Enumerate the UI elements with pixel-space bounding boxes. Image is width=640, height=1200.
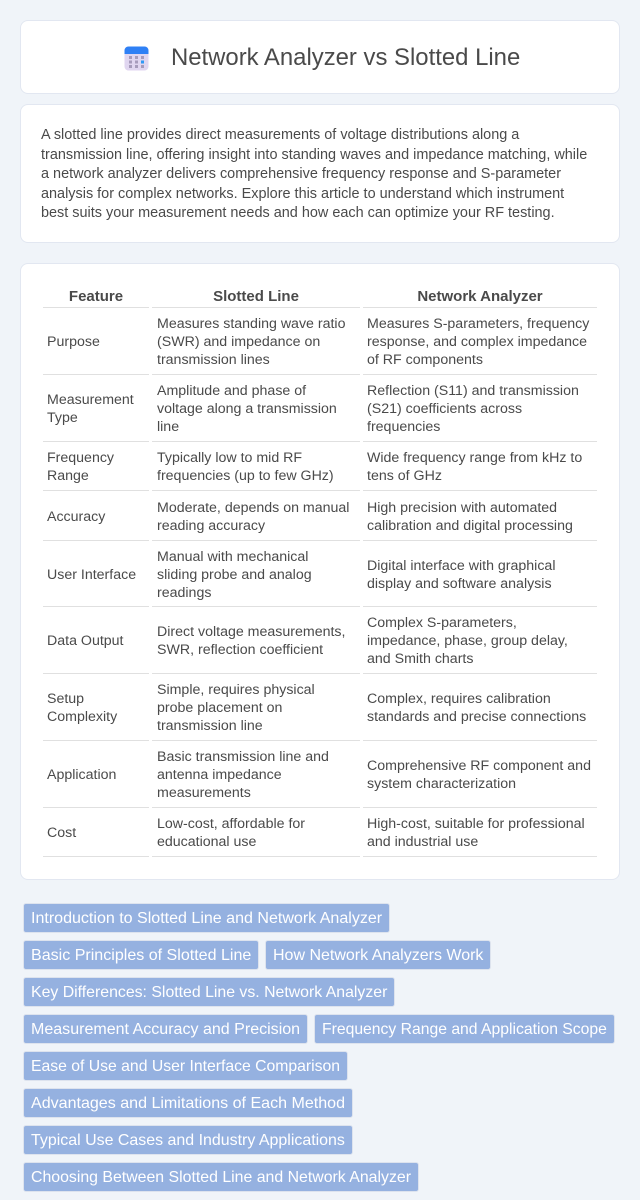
row: setup complexity — [43, 682, 597, 741]
row: accuracy: Moderate, depends on manual — [157, 500, 349, 516]
tag — [23, 1051, 348, 1081]
tag: Measurement Accuracy and Precision — [31, 1020, 300, 1038]
row: cost: and industrial use — [367, 834, 478, 850]
row: purpose: Measures standing wave ratio — [157, 316, 345, 332]
row: user interface: Manual with mechanical — [157, 548, 308, 564]
row: frequency range: Typically low to mid RF — [157, 450, 302, 466]
row: user interface: sliding probe and analog — [157, 566, 312, 582]
row: accuracy: reading accuracy — [157, 518, 265, 534]
intro text: a network analyzer delivers comprehensive frequency response and S-parameter — [41, 166, 561, 182]
row: frequency range: Range — [47, 468, 89, 484]
tag — [23, 1162, 419, 1192]
row: frequency range — [43, 450, 597, 491]
row: data output: impedance, phase, group delay, — [367, 633, 568, 649]
row: setup complexity: Complex, requires calibration — [367, 691, 551, 707]
row: user interface: Digital interface with graphical — [367, 558, 555, 574]
row: accuracy: calibration and digital processing — [367, 518, 573, 534]
row: measurement type: line — [157, 419, 179, 435]
row: application: Comprehensive RF component and — [367, 758, 591, 774]
tag — [314, 1014, 615, 1044]
row: cost — [43, 816, 597, 857]
row: purpose: Purpose — [47, 334, 100, 350]
row: data output: SWR, reflection coefficient — [157, 642, 323, 658]
tag: Key Differences: Slotted Line vs. Network Analyzer — [31, 984, 387, 1001]
table header: Feature — [69, 288, 123, 305]
row: setup complexity: standards and precise connections — [367, 709, 586, 725]
row: cost: educational use — [157, 834, 256, 850]
row: accuracy: Accuracy — [47, 508, 105, 524]
row: measurement type: Type — [47, 410, 78, 426]
tag — [23, 940, 259, 970]
row: user interface: readings — [157, 584, 211, 600]
tag — [265, 940, 491, 970]
row: data output: Complex S-parameters, — [367, 615, 517, 631]
row: purpose: (SWR) and impedance on — [157, 334, 320, 350]
row: application: Application — [47, 767, 116, 783]
tag: Ease of Use and User Interface Comparison — [31, 1058, 340, 1075]
row: setup complexity: transmission line — [157, 718, 263, 734]
row: setup complexity: probe placement on — [157, 700, 282, 716]
tag — [23, 1014, 308, 1044]
tag — [23, 977, 395, 1007]
row: measurement type: (S21) coefficients across — [367, 401, 522, 417]
row: accuracy — [43, 500, 597, 541]
row: measurement type: frequencies — [367, 419, 440, 435]
intro text: A slotted line provides direct measurements of voltage distributions along a — [41, 127, 519, 143]
intro text: transmission line, offering insight into standing waves and impedance matching, while — [41, 146, 587, 162]
tag — [23, 1088, 353, 1118]
row: application: Basic transmission line and — [157, 749, 329, 765]
header card — [20, 20, 620, 94]
row: purpose — [43, 316, 597, 375]
tag: Choosing Between Slotted Line and Network Analyzer — [31, 1169, 411, 1186]
title: Network Analyzer vs Slotted Line — [171, 44, 520, 71]
tag: Frequency Range and Application Scope — [322, 1021, 607, 1038]
row: application: antenna impedance — [157, 767, 282, 783]
table header — [43, 288, 597, 308]
intro text — [41, 127, 587, 221]
row: purpose: transmission lines — [157, 352, 270, 368]
row: data output — [43, 615, 597, 674]
row: data output: Direct voltage measurements, — [157, 624, 345, 640]
tag — [23, 1125, 353, 1155]
table header: Network Analyzer — [417, 288, 543, 305]
tag: Typical Use Cases and Industry Applications — [31, 1132, 345, 1149]
row: measurement type — [43, 383, 597, 442]
topic tags — [23, 903, 615, 1192]
comparison table — [43, 288, 597, 857]
tag — [23, 903, 390, 933]
intro text: analysis for complex networks. Explore this article to understand which instrument — [41, 186, 564, 202]
row: user interface — [43, 548, 597, 607]
row: measurement type: Amplitude and phase of — [157, 383, 306, 399]
row: measurement type: Reflection (S11) and transmission — [367, 383, 579, 399]
row: frequency range: Frequency — [47, 450, 114, 466]
row: frequency range: Wide frequency range from kHz to — [367, 450, 582, 466]
tag: How Network Analyzers Work — [273, 947, 483, 964]
row: frequency range: frequencies (up to few GHz) — [157, 468, 334, 484]
row: measurement type: Measurement — [47, 392, 134, 408]
row: frequency range: tens of GHz — [367, 468, 442, 484]
intro card — [20, 104, 620, 243]
row: accuracy: High precision with automated — [367, 500, 557, 516]
row: application — [43, 749, 597, 808]
row: application: system characterization — [367, 776, 516, 792]
tag: Advantages and Limitations of Each Method — [31, 1094, 345, 1112]
row: data output: and Smith charts — [367, 651, 473, 667]
tag: Basic Principles of Slotted Line — [31, 946, 251, 964]
row: purpose: Measures S-parameters, frequency — [367, 316, 589, 332]
row: cost: High-cost, suitable for professional — [367, 816, 585, 832]
row: setup complexity: Complexity — [47, 709, 117, 725]
comparison table card — [20, 263, 620, 880]
row: user interface: display and software analysis — [367, 576, 552, 592]
row: setup complexity: Setup — [47, 691, 84, 707]
intro text: best suits your measurement needs and how each can optimize your RF testing. — [41, 205, 555, 221]
tag: Introduction to Slotted Line and Network Analyzer — [31, 909, 382, 927]
icon: calendar grid — [124, 46, 148, 70]
row: purpose: response, and complex impedance — [367, 334, 587, 350]
row: cost: Low-cost, affordable for — [157, 816, 305, 832]
row: application: measurements — [157, 785, 251, 801]
row: data output: Data Output — [47, 633, 124, 649]
row: measurement type: voltage along a transmission — [157, 401, 337, 417]
row: cost: Cost — [47, 825, 76, 841]
row: setup complexity: Simple, requires physical — [157, 682, 315, 698]
row: purpose: of RF components — [367, 352, 483, 368]
row: user interface: User Interface — [47, 566, 136, 582]
table header: Slotted Line — [213, 288, 299, 305]
